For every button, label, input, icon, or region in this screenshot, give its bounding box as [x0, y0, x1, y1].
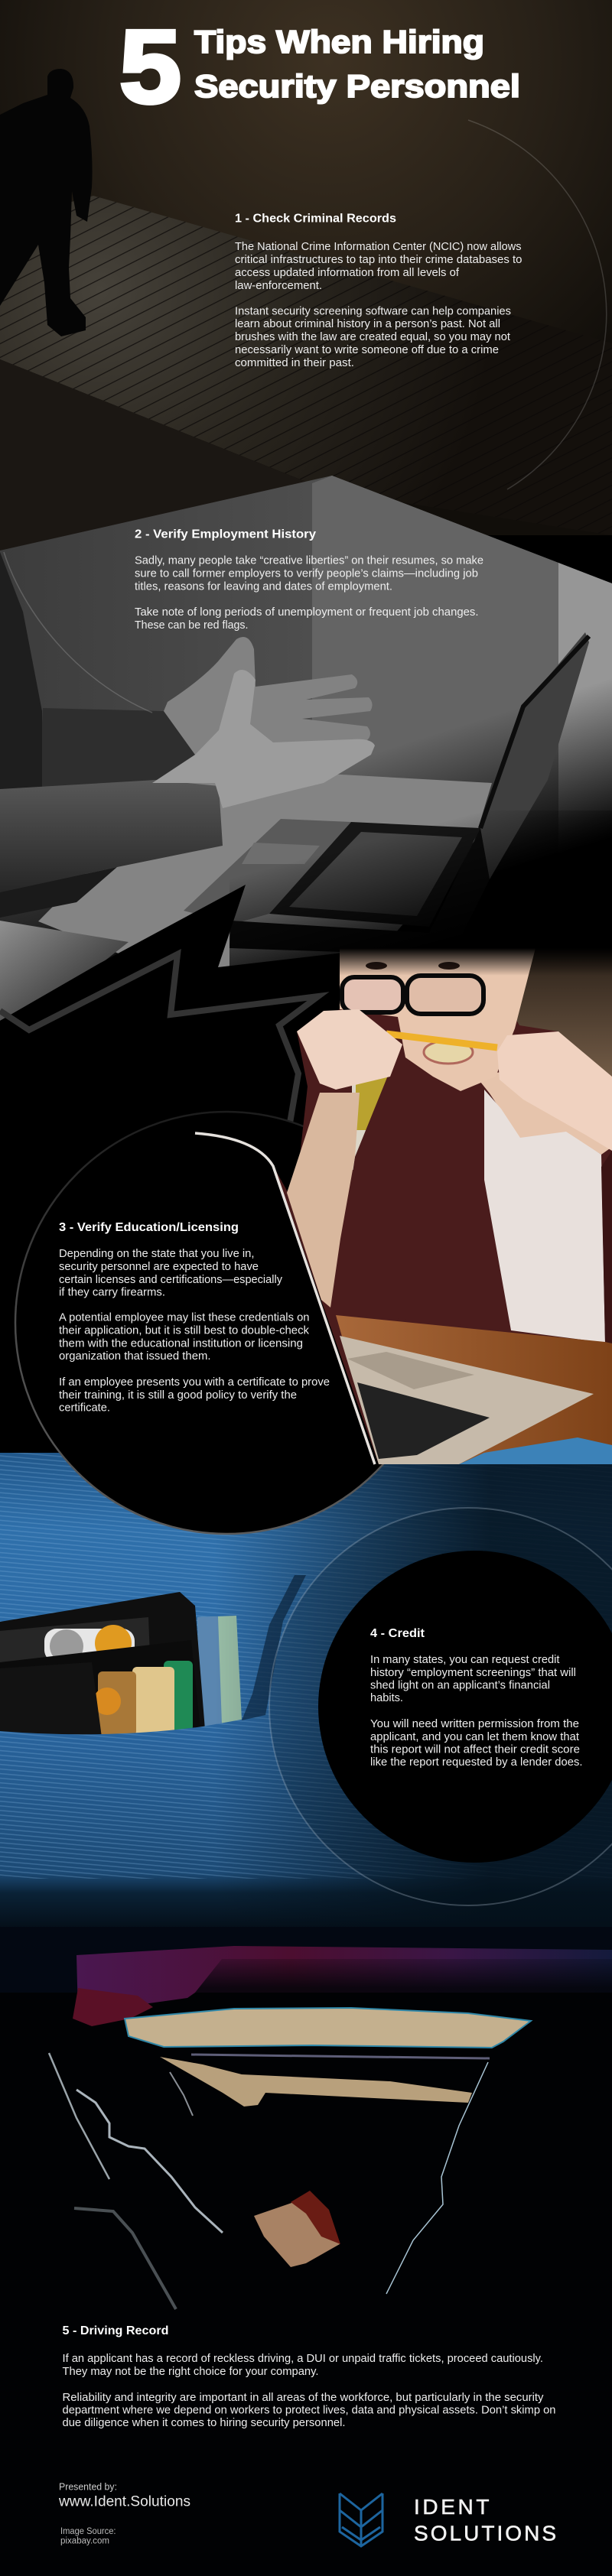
trackpad [242, 843, 320, 864]
text block: 5 driving record: 5 - Driving Record [63, 2324, 168, 2337]
panel: section 1 night boardwalk background [0, 0, 612, 566]
glasses [342, 976, 483, 1014]
desk [38, 766, 492, 967]
pale background [352, 1070, 405, 1170]
text block: 2 verify employment history: titles, reasons for leaving and dates of employment. [135, 581, 392, 593]
text block: 2 verify employment history: Take note of long periods of unemployment or frequent job changes. [135, 606, 479, 619]
title: Security Personnel [194, 68, 520, 104]
left red glow [73, 1988, 153, 2026]
burst outline [0, 954, 318, 1141]
text block: 3 verify education and licensing: organization that issued them. [59, 1350, 211, 1363]
pocket fold shadow [242, 1575, 306, 1720]
text block: 4 credit: history “employment screenings” that will [370, 1667, 576, 1679]
right hand [497, 1031, 612, 1151]
burgundy cardigan [332, 1061, 511, 1330]
panel: section 3 woman biting pencil photo [275, 948, 612, 1464]
text block: 1 check criminal records: committed in their past. [235, 357, 354, 369]
windshield glow [125, 2008, 531, 2048]
text block: 1 check criminal records: access updated information from all levels of [235, 267, 460, 279]
text block: 1 check criminal records [235, 213, 522, 369]
pencil [386, 1034, 497, 1048]
icon: wallet and cards [0, 1592, 242, 1737]
hair [474, 948, 612, 1147]
text block: 4 credit: applicant, and you can let them know that [370, 1731, 579, 1743]
cardigan right [601, 1151, 612, 1353]
text block: 5 driving record: Reliability and integrity are important in all areas of the workforce, but particularly in the security [63, 2392, 544, 2404]
text block: 4 credit: In many states, you can request credit [370, 1654, 560, 1666]
text block: 3 verify education and licensing: their training, it is still a good policy to verify the [59, 1389, 297, 1402]
yellow background [356, 1070, 402, 1130]
logo wordmark: IDENT [414, 2495, 490, 2519]
logo: ident solutions shield [340, 2493, 382, 2546]
right side shade [0, 1443, 612, 2024]
text block: 3 verify education and licensing: them with the educational institution or licensing [59, 1338, 303, 1350]
title: Tips When Hiring [194, 24, 484, 60]
text block: 3 verify education and licensing [59, 1221, 330, 1415]
text block: 1 check criminal records: necessarily want to write someone off due to a crime [235, 344, 499, 356]
text block: 1 check criminal records: 1 - Check Criminal Records [235, 213, 396, 225]
ring: section 4 [269, 1508, 612, 1905]
laptop [340, 1336, 594, 1464]
roof band shade [195, 1959, 612, 1993]
logo wordmark [414, 2495, 556, 2545]
laptop front edge [230, 828, 490, 956]
text block: 3 verify education and licensing: their application, but it is still best to double-check [59, 1324, 310, 1337]
text block: 3 verify education and licensing: 3 - Verify Education/Licensing [59, 1221, 239, 1234]
left hand [297, 1009, 402, 1090]
front hand [152, 670, 375, 808]
text block: 3 verify education and licensing: certain licenses and certifications—especially [59, 1274, 283, 1286]
text block: 3 verify education and licensing: certificate. [59, 1402, 110, 1415]
footer: image source: Image Source: [60, 2527, 116, 2536]
text block: 2 verify employment history: Sadly, many people take “creative liberties” on their resumes, so make [135, 555, 483, 567]
driver outline [49, 2053, 109, 2179]
blue object [459, 1437, 612, 1464]
roof lights band [76, 1946, 612, 2013]
logo wordmark: SOLUTIONS [414, 2522, 556, 2545]
dash highlight [160, 2057, 472, 2107]
text block: 4 credit: habits. [370, 1692, 403, 1704]
panel: section 3 black burst panel [0, 885, 438, 1534]
footer: image source [60, 2527, 116, 2546]
text block: 3 verify education and licensing: Depending on the state that you live in, [59, 1248, 254, 1260]
text block: 1 check criminal records: brushes with the law are created equal, so you may not [235, 331, 510, 343]
text block: 1 check criminal records: Instant security screening software can help companies [235, 306, 511, 318]
text block: 5 driving record: department where we depend on workers to protect lives, data and physical assets. Don’t skimp on [63, 2404, 555, 2416]
text block: 4 credit: shed light on an applicant’s financial [370, 1679, 550, 1691]
text block: 5 driving record: They may not be the right choice for your company. [63, 2366, 318, 2378]
panel: section 4 blue shirt pocket background [0, 1443, 612, 2024]
text block: 5 driving record: If an applicant has a record of reckless driving, a DUI or unpaid traffic tickets, proceed cautiously. [63, 2353, 543, 2365]
text block: 1 check criminal records: The National Crime Information Center (NCIC) now allows [235, 241, 522, 253]
wall fade [0, 658, 612, 1025]
panel: section 2 hands and laptop photo [0, 476, 612, 1025]
icon: walking silhouette [0, 69, 93, 336]
text block: 4 credit: this report will not affect their credit score [370, 1743, 580, 1756]
upper arm [0, 552, 42, 791]
black circle with outline [15, 1112, 438, 1534]
text block: 2 verify employment history [135, 528, 483, 632]
text block: 2 verify employment history: These can be red flags. [135, 619, 248, 632]
paper and pen [0, 921, 129, 1021]
arc: section 2 ring [4, 552, 152, 713]
text block: 4 credit: You will need written permission from the [370, 1718, 579, 1730]
eyes [366, 962, 460, 970]
footer: presented by: www.Ident.Solutions [58, 2494, 190, 2509]
lower arm shadow [0, 867, 117, 918]
title [119, 8, 520, 125]
back sleeve [39, 708, 195, 788]
laptop screen [480, 632, 589, 879]
text block: 4 credit [370, 1627, 583, 1769]
laptop screen white edge [195, 1133, 375, 1464]
footer: image source: pixabay.com [60, 2537, 109, 2546]
shirt pocket front [0, 1575, 612, 2024]
neck and chest skin [474, 1070, 612, 1155]
text block: 3 verify education and licensing: if they carry firearms. [59, 1286, 165, 1298]
text block: 5 driving record: due diligence when it comes to hiring security personnel. [63, 2417, 346, 2429]
panel: section 5 car interior [0, 1927, 612, 2576]
text block: 2 verify employment history: sure to call former employers to verify people’s claims—including job [135, 567, 478, 580]
footer: presented by: Presented by: [59, 2482, 117, 2493]
front sleeve [0, 780, 223, 892]
ring around section 1 text [468, 120, 607, 489]
text block: 1 check criminal records: learn about criminal history in a person’s past. Not all [235, 318, 500, 330]
black circle behind section 4 text [318, 1551, 612, 1863]
text block: 1 check criminal records: critical infrastructures to tap into their crime databases to [235, 254, 522, 266]
text block: 4 credit: 4 - Credit [370, 1627, 425, 1640]
back hand [164, 637, 373, 780]
hand on wheel [254, 2201, 340, 2267]
forearm [287, 1093, 360, 1307]
text block: 4 credit: like the report requested by a lender does. [370, 1756, 583, 1769]
white shirt [484, 1090, 605, 1343]
footer: presented by [58, 2482, 190, 2509]
title: 5 [119, 8, 181, 125]
face [340, 948, 536, 1091]
text block: 3 verify education and licensing: security personnel are expected to have [59, 1261, 259, 1273]
text block: 2 verify employment history: 2 - Verify Employment History [135, 528, 316, 541]
mouth and teeth [424, 1041, 473, 1064]
text block: 1 check criminal records: law-enforcement. [235, 280, 322, 292]
text block: 5 driving record [63, 2324, 555, 2429]
keyboard [269, 822, 480, 927]
text block: 3 verify education and licensing: If an employee presents you with a certificate to prove [59, 1376, 330, 1389]
laptop base [184, 819, 351, 924]
desk wood [336, 1315, 612, 1464]
text block: 3 verify education and licensing: A potential employee may list these credentials on [59, 1312, 309, 1324]
